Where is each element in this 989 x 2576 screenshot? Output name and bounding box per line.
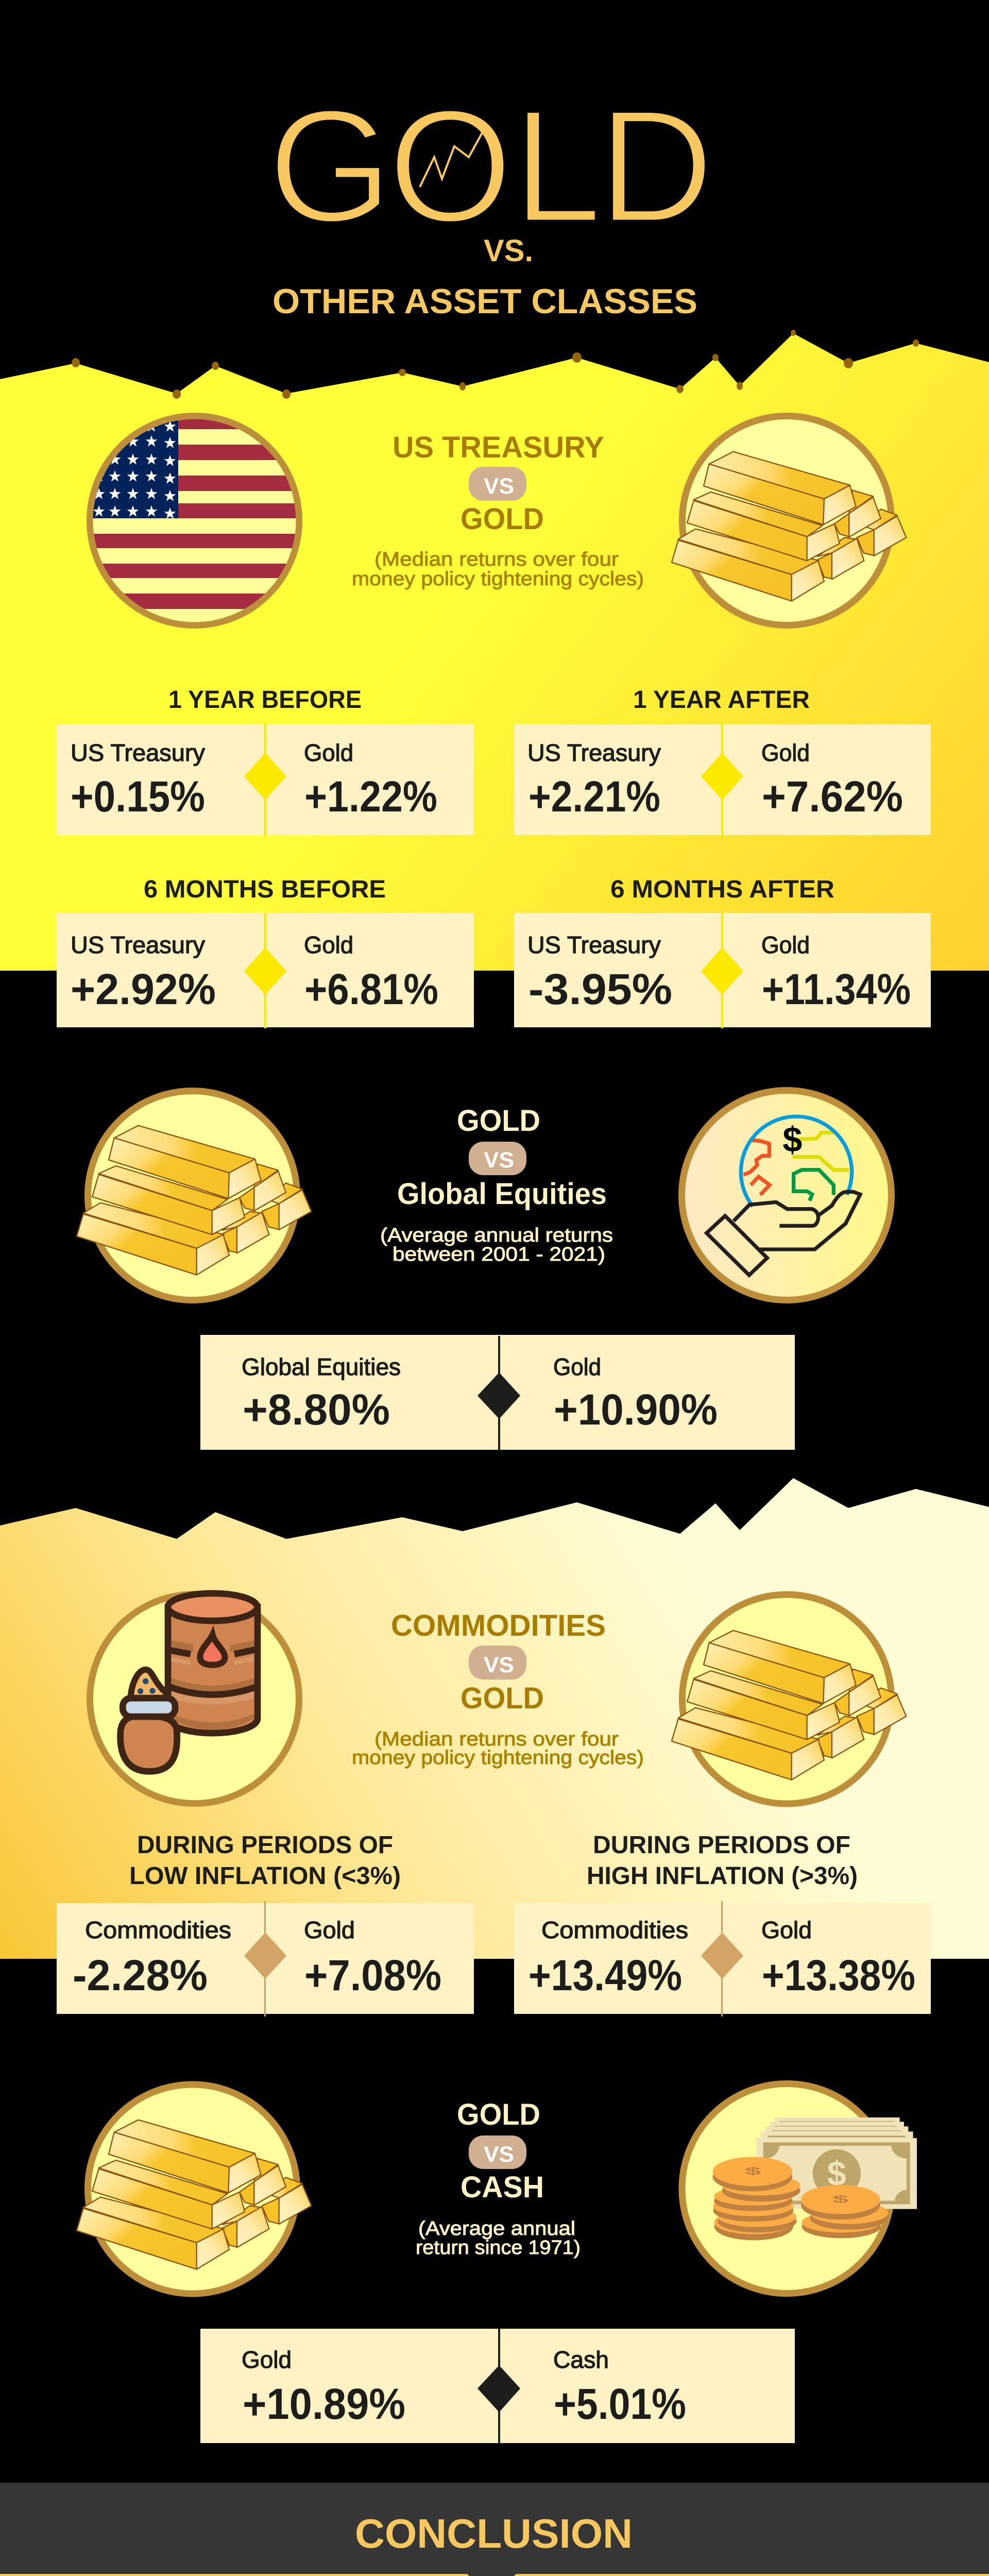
heading: Gold vs Global Equities: between 2001 - 2021) [393, 1244, 605, 1265]
panel: conclusion header [0, 2483, 989, 2574]
stat card: Gold vs Cash: Gold [242, 2346, 292, 2373]
stat card: Global Equities vs Gold [200, 1335, 795, 1450]
panel: commodities background [0, 1478, 989, 1959]
icon: cash and coins: $ [827, 2155, 846, 2193]
stat block: high inflation [514, 1832, 931, 2016]
icon: hand holding globe [682, 1090, 891, 1300]
heading: US Treasury vs Gold: money policy tightening cycles) [352, 568, 644, 590]
stat block: 6 months before: 6 MONTHS BEFORE [144, 876, 386, 903]
heading: Gold vs Cash [416, 2098, 581, 2259]
stat block: 1 year after [514, 686, 931, 836]
stat block: 1 year before: Gold [304, 739, 353, 766]
stat block: 6 months before [57, 876, 474, 1028]
heading: US Treasury vs Gold: GOLD [461, 502, 544, 536]
stat block: high inflation: DURING PERIODS OF [593, 1832, 850, 1859]
heading: Gold vs Cash: return since 1971) [416, 2237, 581, 2259]
stat block: 1 year after: Gold [761, 739, 810, 766]
heading: Commodities vs Gold: GOLD [461, 1682, 544, 1715]
icon: hand holding globe: $ [782, 1121, 802, 1160]
stat block: 6 months after: +11.34% [762, 965, 911, 1013]
panel: US Treasury vs Gold yellow background [0, 330, 989, 971]
stat block: low inflation [57, 1832, 474, 2016]
title [268, 77, 714, 321]
heading: Gold vs Global Equities: Global Equities [397, 1177, 607, 1211]
stat block: 1 year before: +0.15% [71, 772, 205, 821]
note: (Median returns over four [374, 1728, 619, 1750]
stat block: low inflation: LOW INFLATION (<3%) [129, 1862, 401, 1890]
stat block: 1 year before [57, 686, 474, 836]
heading: US Treasury vs Gold: VS [484, 474, 514, 499]
title: other asset classes: OTHER ASSET CLASSES [272, 282, 697, 321]
icon: US flag circle [88, 412, 304, 629]
arrow: pointer [467, 2574, 516, 2576]
stat block: 6 months after [514, 876, 931, 1028]
stat block: 6 months before: Gold [304, 931, 353, 958]
note: (Average annual returns [380, 1225, 613, 1246]
vs pill [469, 1142, 526, 1175]
ridge dots [72, 330, 919, 399]
vs pill [469, 467, 526, 501]
heading: US Treasury vs Gold: US TREASURY [393, 431, 604, 464]
stat card: Global Equities vs Gold: Gold [553, 1353, 601, 1380]
stat block: 1 year after: 1 YEAR AFTER [633, 686, 810, 714]
stat block: low inflation: +7.08% [304, 1951, 441, 1999]
stat card: Gold vs Cash: +5.01% [554, 2380, 686, 2428]
stat block: 1 year after: +7.62% [762, 772, 903, 821]
vs pill [469, 1646, 526, 1680]
icon: cash and coins: $ [832, 2193, 849, 2205]
stat block: high inflation: Commodities [541, 1917, 688, 1943]
stat block: low inflation: DURING PERIODS OF [137, 1832, 393, 1859]
stat card: Gold vs Cash: Cash [553, 2346, 609, 2373]
icon: gold bars circle, section 3 [672, 1595, 906, 1804]
stat block: low inflation: -2.28% [73, 1951, 208, 1999]
stat block: high inflation: +13.38% [762, 1951, 915, 1999]
stat card: Global Equities vs Gold: Global Equities [242, 1353, 401, 1380]
heading: Gold vs Global Equities [380, 1104, 613, 1265]
heading: Commodities vs Gold: COMMODITIES [391, 1609, 606, 1642]
icon: rising chart line inside the O [420, 133, 482, 187]
heading: Commodities vs Gold: money policy tightening cycles) [352, 1747, 644, 1769]
stat block: 6 months after: Gold [761, 931, 810, 958]
vs pill [469, 2136, 526, 2169]
stat card: Gold vs Cash [200, 2329, 795, 2443]
stat block: 1 year before: 1 YEAR BEFORE [168, 686, 362, 714]
icon: gold bars circle, section 4 [77, 2084, 311, 2294]
stat block: high inflation: Gold [761, 1917, 812, 1943]
heading: Gold vs Cash: GOLD [457, 2098, 540, 2131]
heading: US Treasury vs Gold [352, 431, 644, 590]
stat block: low inflation: Gold [304, 1917, 355, 1943]
heading: Gold vs Cash: CASH [461, 2171, 544, 2204]
stat card: Gold vs Cash: +10.89% [243, 2380, 405, 2428]
note: (Average annual [418, 2218, 575, 2240]
stat block: 6 months after: -3.95% [528, 965, 672, 1013]
stat block: 1 year before: US Treasury [71, 739, 205, 766]
stat card: Global Equities vs Gold: +8.80% [243, 1385, 390, 1434]
icon: cash and coins [682, 2083, 917, 2294]
icon: gold bars circle, section 1 [672, 416, 906, 625]
icon: commodities barrel and sack [90, 1594, 299, 1803]
heading: Gold vs Global Equities: VS [484, 1148, 514, 1173]
title: VS.: VS. [484, 233, 533, 268]
stat block: 6 months after: 6 MONTHS AFTER [610, 876, 834, 903]
stat block: high inflation: +13.49% [528, 1951, 682, 1999]
panel: conclusion body [0, 2574, 989, 2576]
heading: conclusion: CONCLUSION [355, 2511, 633, 2556]
note: (Median returns over four [374, 549, 619, 570]
title word: GOLD: GOLD [268, 77, 714, 256]
heading: Commodities vs Gold [352, 1609, 644, 1769]
stat block: high inflation: HIGH INFLATION (>3%) [587, 1862, 858, 1890]
stat block: 1 year after: +2.21% [528, 772, 660, 821]
stat block: low inflation: Commodities [85, 1917, 231, 1943]
stat card: Global Equities vs Gold: +10.90% [554, 1385, 718, 1434]
heading: Commodities vs Gold: VS [484, 1653, 514, 1677]
stat block: 1 year after: US Treasury [527, 739, 661, 766]
heading: Gold vs Global Equities: GOLD [457, 1104, 540, 1138]
heading: Gold vs Cash: VS [484, 2142, 514, 2167]
stat block: 6 months before: +6.81% [304, 965, 438, 1013]
icon: gold bars circle, section 2 [77, 1091, 311, 1300]
stat block: 6 months before: US Treasury [71, 931, 205, 958]
stat block: 6 months before: +2.92% [71, 965, 216, 1013]
icon: cash and coins: $ [745, 2165, 761, 2177]
stat block: 1 year before: +1.22% [304, 772, 437, 821]
stat block: 6 months after: US Treasury [527, 931, 661, 958]
